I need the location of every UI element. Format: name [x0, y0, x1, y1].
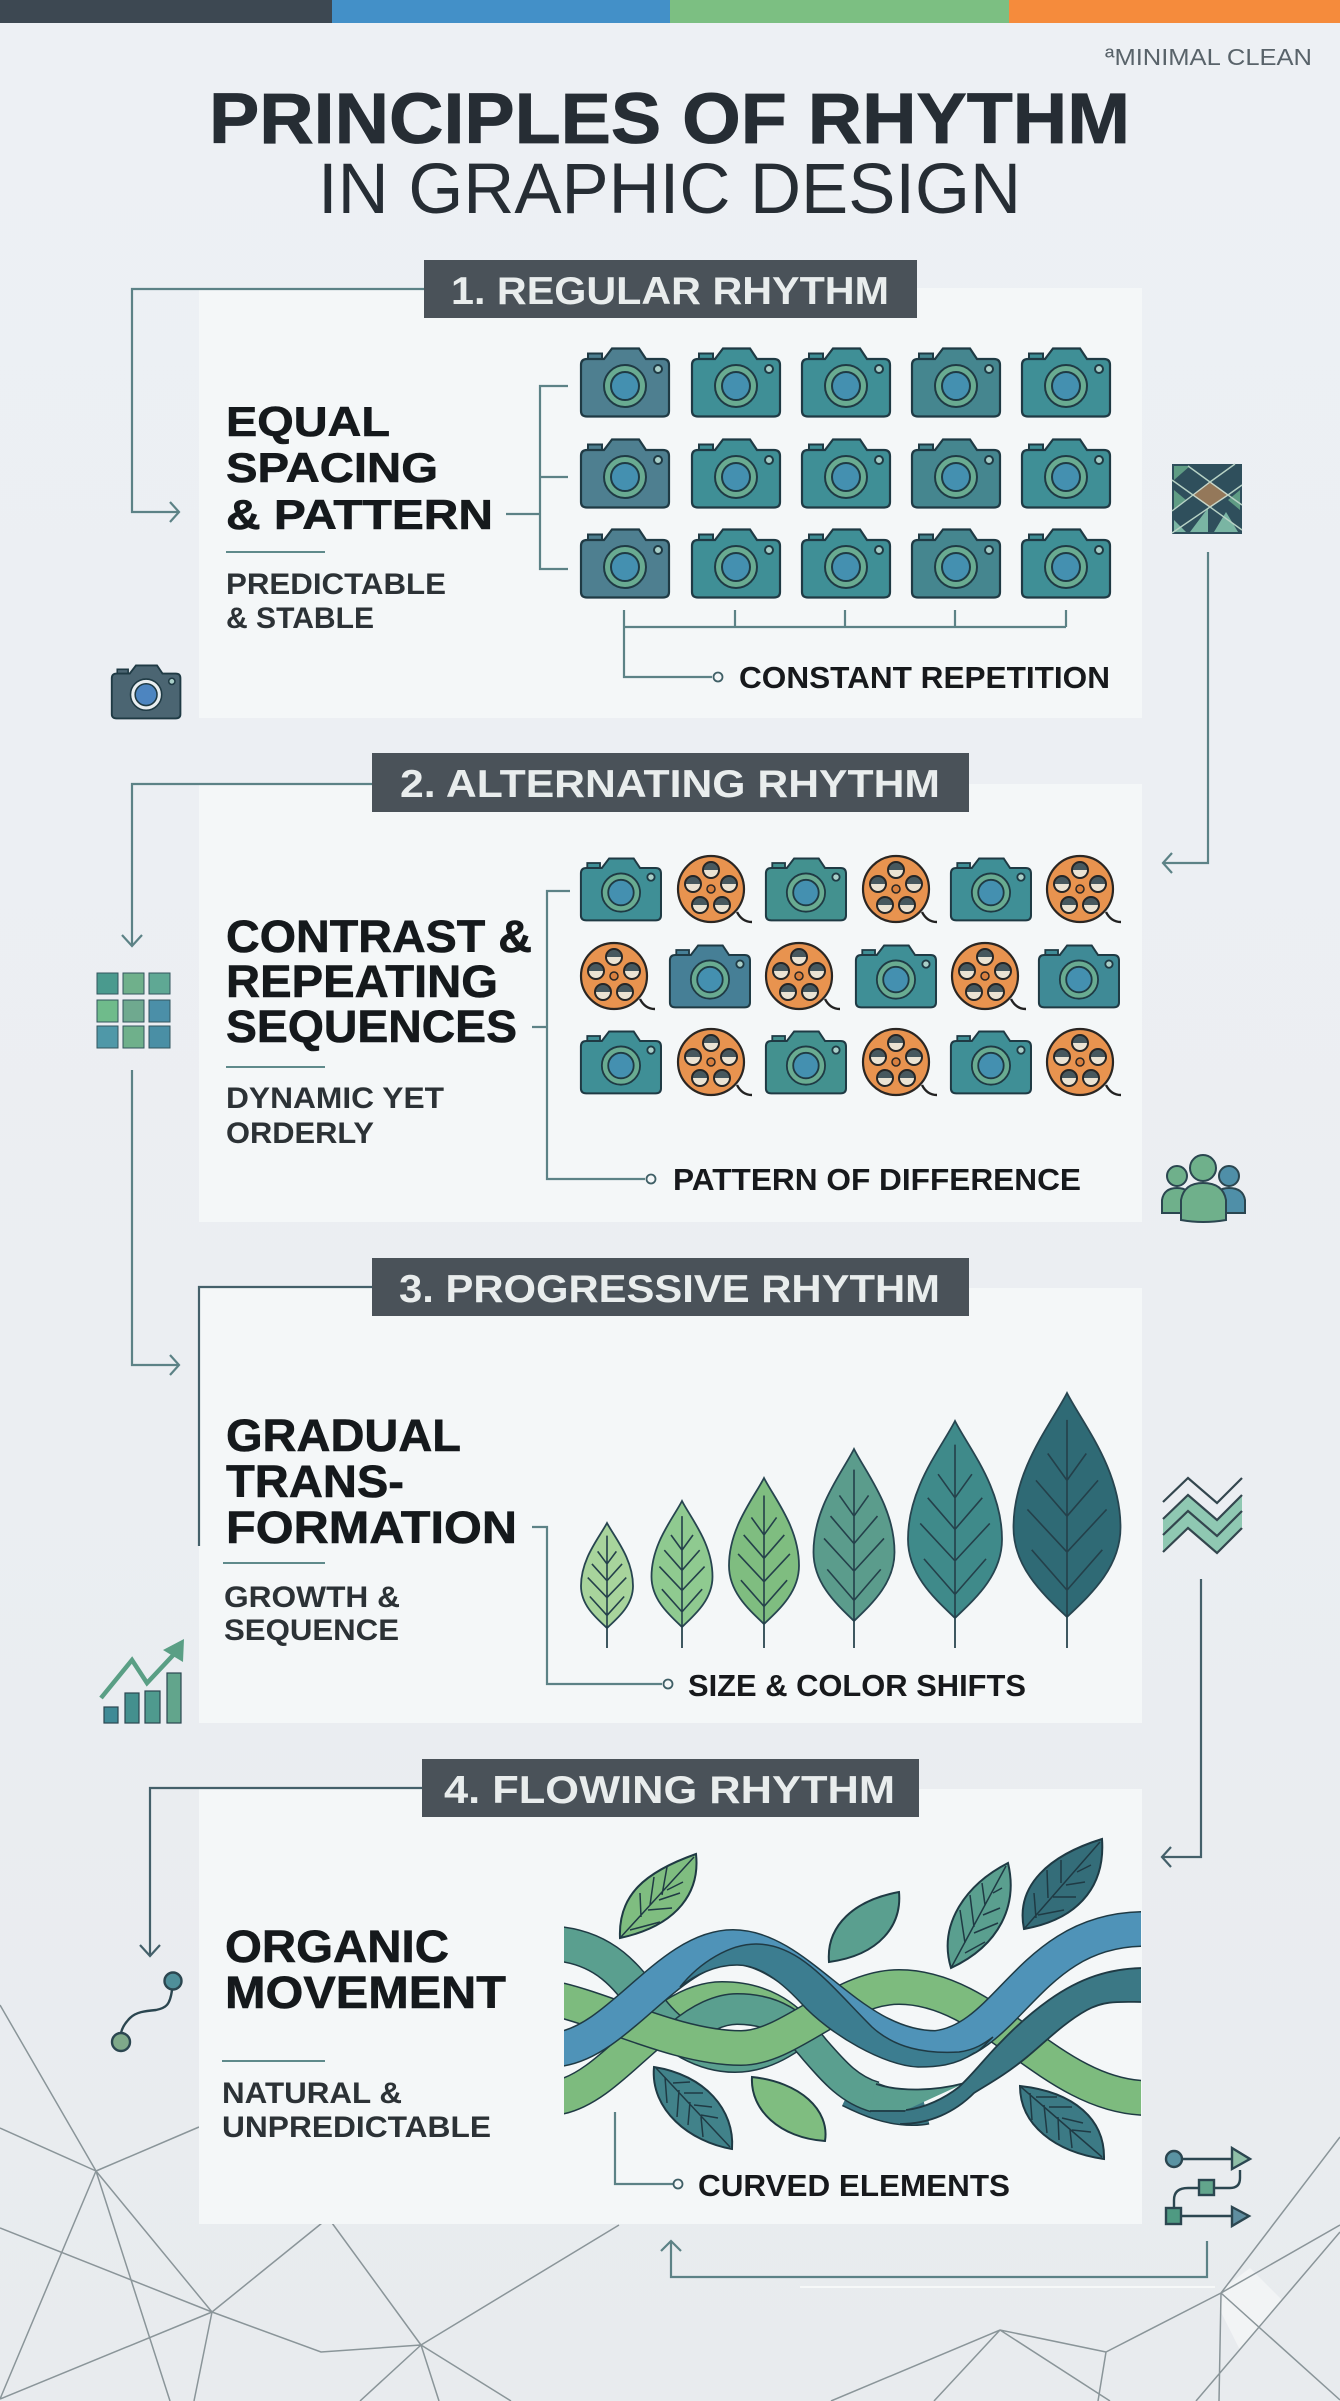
label: constant repetition: CONSTANT REPETITION [739, 660, 1110, 695]
section header 3: 3. PROGRESSIVE RHYTHM [399, 1268, 940, 1311]
subtext: dynamic yet orderly: DYNAMIC YET [226, 1082, 444, 1115]
arrow: grid icon to panel 3 [132, 1070, 179, 1375]
style tag: ªMINIMAL CLEAN [1105, 44, 1312, 70]
subtext: natural and unpredictable [222, 2077, 491, 2144]
heading: contrast and repeating sequences: CONTRAST & [226, 911, 532, 962]
title [209, 80, 1130, 229]
icon: camera [112, 665, 180, 718]
divider [222, 2060, 325, 2062]
divider [223, 1562, 325, 1564]
panel corner line [199, 1287, 372, 1546]
heading: organic movement [225, 1921, 506, 2018]
arrow: header 2 to grid icon [122, 784, 372, 946]
section header 2 [372, 753, 969, 812]
heading: equal spacing and pattern: EQUAL [226, 398, 390, 445]
top colour bar [0, 0, 1340, 23]
subtext: growth and sequence: GROWTH & [224, 1581, 400, 1614]
arrow: header 1 to panel 1 [132, 289, 424, 522]
section header 1: 1. REGULAR RHYTHM [451, 270, 889, 313]
subtext: growth and sequence [224, 1581, 400, 1647]
section header 4: 4. FLOWING RHYTHM [444, 1769, 895, 1812]
icon: geometric pattern [1172, 464, 1242, 534]
heading: equal spacing and pattern: & PATTERN [226, 491, 493, 538]
growing leaf sequence [581, 1393, 1120, 1648]
arrow: zigzag icon to panel 4 [1162, 1579, 1201, 1867]
heading: organic movement: ORGANIC [225, 1921, 449, 1972]
bracket and callout line [532, 891, 656, 1184]
divider [226, 551, 325, 553]
subtext: dynamic yet orderly [226, 1082, 444, 1150]
woven ribbons [560, 1929, 1145, 2124]
subtext: natural and unpredictable: NATURAL & [222, 2077, 402, 2110]
section header 2: 2. ALTERNATING RHYTHM [400, 763, 940, 806]
background geometric network [0, 2005, 1340, 2401]
heading: contrast and repeating sequences: SEQUENCES [226, 1001, 517, 1052]
arrow: pattern icon to panel 2 [1163, 552, 1208, 873]
heading: gradual transformation: TRANS- [226, 1456, 404, 1507]
label: curved elements: CURVED ELEMENTS [698, 2168, 1010, 2203]
bracket to camera rows [506, 386, 568, 569]
arrow: header 4 to squiggle icon [140, 1788, 422, 1956]
icon: zigzag waves [1163, 1478, 1242, 1553]
organic leaves [620, 1839, 1104, 2159]
heading: gradual transformation: FORMATION [226, 1502, 517, 1553]
alternating camera and film reel grid [581, 856, 1121, 1095]
panel: progressive rhythm [199, 1258, 1142, 1723]
subtext: growth and sequence: SEQUENCE [224, 1614, 399, 1647]
section header 4 [422, 1759, 919, 1817]
bracket and callout line [532, 1527, 672, 1688]
heading: equal spacing and pattern: SPACING [226, 444, 438, 491]
panel: alternating rhythm [199, 753, 1142, 1222]
heading: gradual transformation [226, 1410, 517, 1553]
camera grid [581, 348, 1110, 598]
heading: organic movement: MOVEMENT [225, 1967, 506, 2018]
icon: people [1162, 1155, 1245, 1222]
title: PRINCIPLES OF RHYTHM [209, 80, 1130, 159]
icon: grid [97, 973, 170, 1048]
section header 3 [372, 1258, 969, 1316]
icon: flow diagram [1166, 2148, 1250, 2226]
title: IN GRAPHIC DESIGN [318, 150, 1021, 229]
panel: flowing rhythm [199, 1759, 1145, 2224]
subtext: dynamic yet orderly: ORDERLY [226, 1117, 374, 1150]
section header 1 [424, 260, 917, 318]
subtext: predictable and stable: PREDICTABLE [226, 568, 446, 601]
subtext: natural and unpredictable: UNPREDICTABLE [222, 2111, 491, 2144]
icon: growth chart [101, 1639, 184, 1723]
arrow: flow icon back to panel 4 [661, 2241, 1207, 2277]
heading: contrast and repeating sequences: REPEATING [226, 956, 498, 1007]
divider [226, 1066, 325, 1068]
spacing ruler and callout line [624, 610, 1066, 682]
heading: gradual transformation: GRADUAL [226, 1410, 461, 1461]
panel: regular rhythm [199, 260, 1142, 718]
label: size and color shifts: SIZE & COLOR SHIFTS [688, 1668, 1026, 1703]
subtext: predictable and stable: & STABLE [226, 602, 374, 635]
heading: contrast and repeating sequences [226, 911, 532, 1052]
subtext: predictable and stable [226, 568, 446, 635]
heading: equal spacing and pattern [226, 398, 493, 538]
callout line [615, 2112, 682, 2188]
icon: squiggle path [112, 1972, 182, 2051]
label: pattern of difference: PATTERN OF DIFFERENCE [673, 1162, 1081, 1197]
